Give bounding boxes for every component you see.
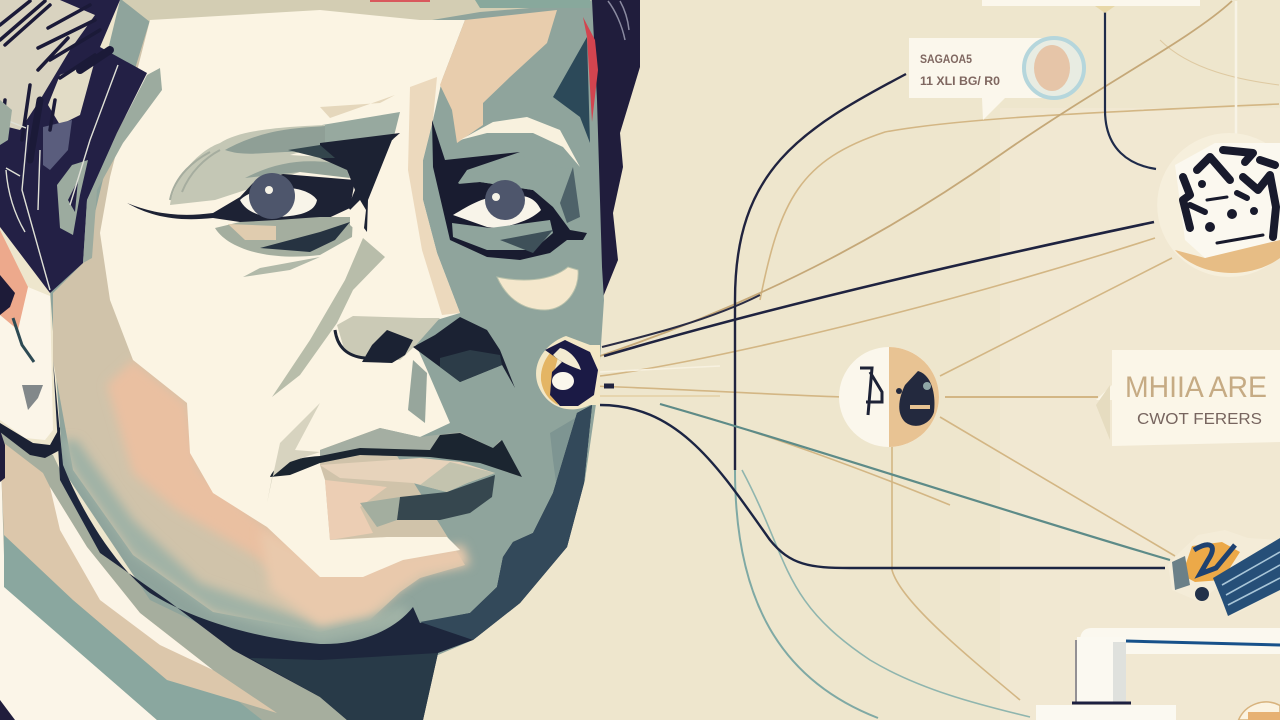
teal line to brush	[660, 404, 1170, 560]
neck teal strip	[4, 535, 262, 720]
grey forehead brow shadow	[320, 112, 400, 145]
small connector	[604, 384, 614, 388]
navy line to seal	[604, 222, 1154, 356]
right brow white	[460, 117, 580, 167]
icon: bottom corner dial	[1238, 702, 1280, 720]
chin patches	[325, 475, 495, 540]
tan thin lines	[590, 40, 1279, 700]
callout: right label	[1096, 350, 1280, 446]
face teal band	[62, 440, 410, 642]
callout: upper label: 11 XLI BG/ R0	[920, 74, 1000, 88]
network connector lines	[590, 1, 1279, 718]
navy curve from top label	[735, 74, 906, 470]
face base	[50, 0, 604, 660]
nostrils	[335, 317, 515, 388]
nose bottom	[337, 316, 440, 360]
diagonal tan and navy line	[600, 1, 1232, 356]
right eye	[432, 120, 587, 260]
navy vertical to seal	[1105, 12, 1156, 169]
right cheek fold	[550, 417, 577, 497]
peach chin	[260, 530, 470, 625]
face beige shadow	[53, 20, 465, 632]
hair dark strokes	[0, 1, 110, 160]
teal continuation	[735, 470, 878, 718]
left eye	[127, 133, 400, 277]
icon: brush stroke	[1168, 530, 1280, 616]
white apparatus bottom right	[1036, 628, 1280, 720]
label heading text: MHIIA ARE	[1125, 371, 1267, 404]
label sub text: CWOT FERERS	[1137, 411, 1262, 428]
peach cheek	[107, 360, 320, 600]
hair: left side	[0, 0, 162, 293]
jaw and neck dark	[53, 360, 592, 720]
mouth left crease	[267, 403, 320, 503]
nose bridge tone	[408, 77, 460, 315]
collar	[0, 480, 157, 720]
hair grey fringe	[83, 68, 162, 263]
philtrum	[408, 360, 427, 423]
hair highlights	[0, 0, 95, 130]
white vertical guide	[1235, 1, 1237, 135]
neck grey	[0, 430, 350, 720]
callout text: SAGAOA5	[920, 52, 972, 66]
portrait	[0, 0, 640, 720]
top label box	[982, 0, 1200, 13]
face cream	[100, 10, 465, 577]
hair: right side	[590, 0, 640, 297]
icon: cheek node	[536, 336, 600, 409]
callout: upper label	[909, 38, 1084, 120]
neck highlight	[50, 487, 213, 670]
left brow	[170, 125, 350, 205]
icon: central split circle	[839, 347, 939, 447]
neck beige band	[0, 440, 277, 713]
ear	[0, 230, 60, 458]
icon: seal with pattern	[1157, 133, 1280, 277]
nose side grey	[272, 238, 385, 397]
top forehead band	[122, 0, 592, 22]
temple dark and red	[553, 17, 598, 143]
right cheek crescent	[497, 267, 578, 310]
forehead peach	[440, 10, 557, 143]
neck and shirt	[0, 430, 350, 720]
mouth	[270, 428, 522, 492]
icon: callout circle	[1024, 38, 1084, 98]
navy curve to brush	[600, 405, 1165, 568]
